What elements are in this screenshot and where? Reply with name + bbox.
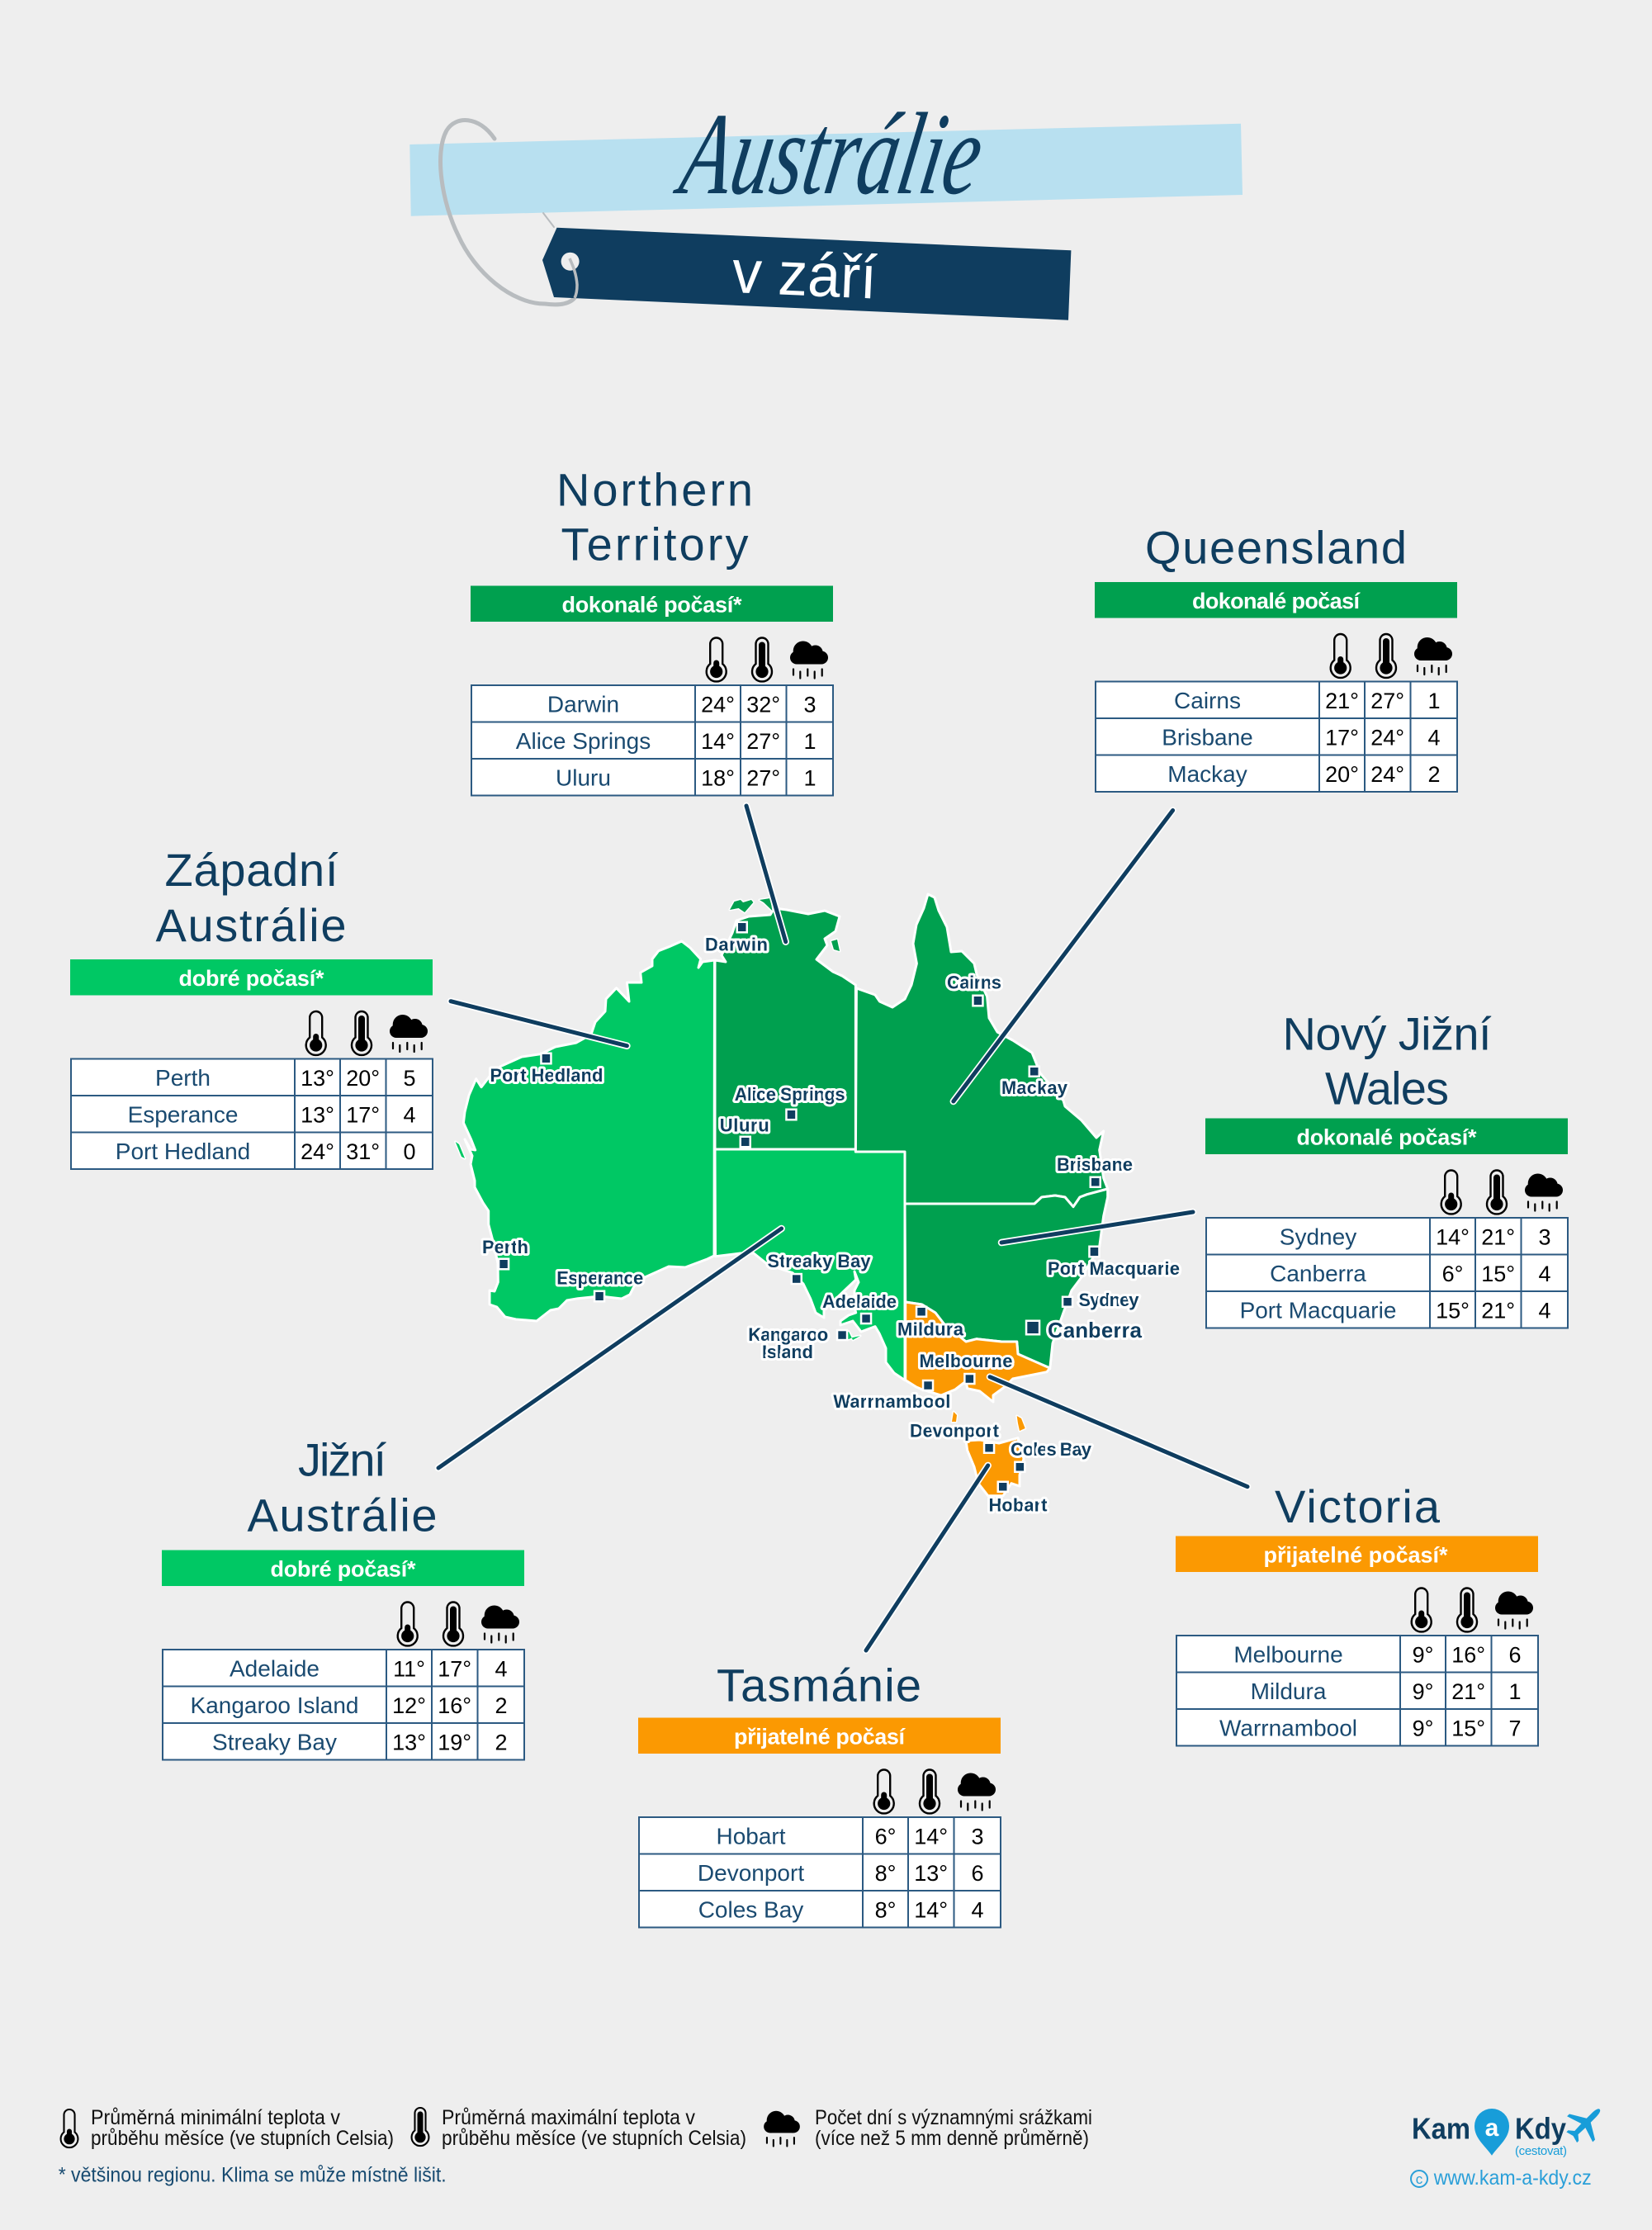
- row: Mildura: 21°: [1451, 1679, 1485, 1704]
- table: [71, 1058, 433, 1169]
- row: Port Hedland: [116, 1139, 416, 1164]
- city labels: Kangaroo: [748, 1324, 828, 1345]
- legend text: rain: (více než 5 mm denně průměrně): [815, 2127, 1089, 2150]
- heading: Západní Austrálie: Austrálie: [155, 899, 347, 951]
- region: Queensland: [855, 894, 1108, 1207]
- leader line: South Australia: [438, 1229, 782, 1468]
- row: Port Hedland: 31°: [346, 1139, 380, 1164]
- heading: Tasmánie: Tasmánie: [717, 1659, 921, 1711]
- panel: Western Australia: [70, 844, 433, 1169]
- row: Cairns: Cairns: [1174, 688, 1241, 713]
- row: Port Macquarie: [1240, 1298, 1551, 1323]
- rating banner: [1095, 582, 1457, 618]
- legend text: minimum temperature: [91, 2106, 394, 2150]
- row: Mackay: 2: [1427, 762, 1441, 787]
- rating banner: přijatelné počasí*: [1263, 1542, 1448, 1567]
- title tag: v září: v září: [731, 237, 878, 312]
- row: Adelaide: 11°: [393, 1656, 425, 1681]
- tag string: [441, 121, 577, 305]
- row: Uluru: 18°: [701, 766, 735, 791]
- heading: Northern Territory: Territory: [561, 518, 748, 570]
- icon: maximum temperature: [1487, 1171, 1507, 1214]
- row: Devonport: 6: [971, 1861, 984, 1886]
- rating banner: dobré počasí*: [178, 966, 324, 991]
- icon: rain: [790, 641, 828, 679]
- icon: minimum temperature: [398, 1602, 418, 1645]
- city labels: Adelaide: [822, 1291, 897, 1312]
- city labels: Perth: [482, 1237, 528, 1257]
- row: Darwin: [547, 692, 817, 717]
- heading: Západní Austrálie: Západní: [165, 844, 338, 896]
- row: Alice Springs: Alice Springs: [516, 728, 651, 754]
- row: Perth: Perth: [155, 1065, 211, 1091]
- city labels: Cairns: [947, 973, 1001, 993]
- city labels: Uluru: [720, 1115, 769, 1136]
- row: Brisbane: 4: [1427, 725, 1441, 750]
- table: [1176, 1636, 1538, 1745]
- icon: maximum temperature: [443, 1602, 463, 1645]
- row: Streaky Bay: 13°: [392, 1730, 426, 1755]
- row: Darwin: 3: [803, 692, 817, 717]
- row: Uluru: [556, 765, 817, 791]
- city labels: Streaky Bay: [768, 1251, 871, 1271]
- leader line: Victoria: [990, 1377, 1247, 1487]
- logo: Kam a Kdy: Kam: [1412, 2112, 1470, 2146]
- row: Brisbane: [1162, 725, 1441, 750]
- heading: Northern Territory: [556, 464, 753, 570]
- leader line: Western Australia: [451, 1001, 627, 1046]
- icon: map pin: a: [1485, 2114, 1499, 2142]
- table: [1206, 1218, 1568, 1328]
- row: Port Hedland: 24°: [301, 1139, 334, 1164]
- leader line: Queensland: [954, 811, 1173, 1101]
- row: Coles Bay: 4: [971, 1897, 984, 1922]
- row: Uluru: 1: [803, 766, 817, 791]
- row: Sydney: Sydney: [1280, 1224, 1356, 1250]
- row: Kangaroo Island: Kangaroo Island: [191, 1693, 358, 1718]
- city labels: Island: [762, 1342, 813, 1362]
- row: Kangaroo Island: [191, 1693, 508, 1718]
- legend: [61, 2106, 1092, 2150]
- icon: maximum temperature: [1457, 1588, 1477, 1631]
- row: Port Hedland: 0: [403, 1139, 416, 1164]
- icon: map pin: [1474, 2109, 1509, 2156]
- logo: Kam a Kdy: (cestovat): [1515, 2144, 1567, 2158]
- row: Alice Springs: 1: [803, 729, 817, 754]
- icon: rain: [481, 1605, 519, 1643]
- panel: New South Wales: [1205, 1007, 1568, 1328]
- title band: Austrálie: [409, 124, 1243, 216]
- row: Streaky Bay: Streaky Bay: [212, 1729, 337, 1755]
- icon: airplane: [1559, 2096, 1612, 2150]
- row: Adelaide: 17°: [438, 1656, 471, 1681]
- row: Coles Bay: 14°: [914, 1897, 948, 1922]
- row: Sydney: [1280, 1224, 1551, 1250]
- row: Perth: 13°: [301, 1066, 334, 1091]
- row: Mildura: [1251, 1678, 1522, 1704]
- row: Hobart: Hobart: [716, 1823, 786, 1849]
- legend text: rain: [815, 2106, 1092, 2150]
- row: Darwin: 24°: [701, 692, 735, 717]
- icon: minimum temperature: [1441, 1171, 1461, 1214]
- row: Cairns: 21°: [1325, 689, 1359, 713]
- legend icon: minimum temperature: [61, 2109, 78, 2147]
- rating banner: [162, 1551, 524, 1586]
- row: Adelaide: [230, 1656, 508, 1681]
- row: Perth: 5: [403, 1066, 416, 1091]
- row: Hobart: 14°: [914, 1825, 948, 1849]
- city labels: Hobart: [989, 1495, 1048, 1516]
- city labels: Brisbane: [1057, 1154, 1133, 1175]
- rating banner: přijatelné počasí: [734, 1724, 906, 1749]
- city labels: Mackay: [1001, 1077, 1068, 1098]
- city labels: Coles Bay: [1011, 1439, 1092, 1460]
- website link: c: [1416, 2171, 1423, 2187]
- legend text: maximum temperature: průběhu měsíce (ve stupních Celsia): [442, 2127, 746, 2150]
- panel: Victoria: [1176, 1480, 1538, 1745]
- leader line: New South Wales: [1001, 1212, 1193, 1243]
- rating banner: dobré počasí*: [271, 1557, 416, 1582]
- city labels: Port Macquarie: [1048, 1258, 1180, 1279]
- row: Port Macquarie: 21°: [1481, 1298, 1515, 1323]
- row: Perth: 20°: [346, 1066, 380, 1091]
- rating banner: [70, 959, 433, 996]
- title script: Austrálie: Austrálie: [668, 88, 992, 219]
- panel: Tasmania: [638, 1659, 1001, 1927]
- table: [1096, 682, 1457, 792]
- rating banner: [1205, 1118, 1568, 1154]
- row: Port Macquarie: 4: [1538, 1298, 1551, 1323]
- row: Warrnambool: 7: [1508, 1716, 1522, 1740]
- city labels: Warrnambool: [833, 1391, 950, 1412]
- region: Tasmania: [952, 1412, 1025, 1496]
- row: Mackay: 24°: [1370, 762, 1404, 787]
- row: Kangaroo Island: 12°: [392, 1693, 426, 1718]
- heading: Nový Jižní Wales: Wales: [1325, 1062, 1449, 1115]
- row: Brisbane: 24°: [1370, 725, 1404, 750]
- row: Devonport: Devonport: [698, 1860, 804, 1886]
- city labels: [482, 935, 1180, 1516]
- map of Australia: [456, 894, 1108, 1496]
- row: Adelaide: Adelaide: [230, 1656, 320, 1681]
- logo: Kam a Kdy: Kdy: [1515, 2112, 1566, 2146]
- row: Warrnambool: [1219, 1716, 1522, 1740]
- row: Coles Bay: 8°: [875, 1897, 896, 1922]
- row: Port Macquarie: Port Macquarie: [1240, 1298, 1396, 1323]
- legend text: maximum temperature: Průměrná maximální teplota v: [442, 2106, 695, 2129]
- city labels: Devonport: [910, 1421, 1000, 1442]
- icon: minimum temperature: [874, 1770, 894, 1813]
- row: Esperance: 17°: [346, 1103, 380, 1128]
- logo: Kam a Kdy: [1412, 2096, 1612, 2158]
- row: Port Macquarie: 15°: [1436, 1298, 1470, 1323]
- legend text: maximum temperature: [442, 2106, 746, 2150]
- legend text: minimum temperature: Průměrná minimální teplota v: [91, 2106, 340, 2129]
- row: Coles Bay: [698, 1897, 984, 1922]
- row: Esperance: Esperance: [128, 1101, 238, 1128]
- row: Cairns: [1174, 688, 1441, 713]
- leader line: Tasmania: [866, 1465, 988, 1650]
- row: Cairns: 27°: [1370, 689, 1404, 713]
- icon: rain: [1525, 1174, 1563, 1210]
- row: Warrnambool: 9°: [1413, 1716, 1433, 1740]
- region: New South Wales: [905, 1189, 1108, 1369]
- row: Port Hedland: Port Hedland: [116, 1139, 250, 1164]
- row: Mackay: 20°: [1325, 762, 1359, 787]
- icon: maximum temperature: [752, 637, 772, 681]
- region: Victoria: [906, 1302, 1050, 1402]
- rating banner: [1176, 1536, 1538, 1572]
- heading: Northern Territory: Northern: [556, 464, 753, 515]
- table: [163, 1650, 524, 1760]
- row: Esperance: [128, 1101, 416, 1128]
- row: Sydney: 21°: [1481, 1225, 1515, 1250]
- icon: rain: [1495, 1592, 1533, 1628]
- row: Streaky Bay: 2: [495, 1730, 508, 1755]
- city labels: Port Hedland: [490, 1065, 603, 1086]
- row: Esperance: 4: [403, 1103, 416, 1128]
- row: Perth: [155, 1065, 416, 1091]
- row: Kangaroo Island: 2: [495, 1693, 508, 1718]
- city markers: [499, 923, 1100, 1491]
- row: Hobart: 3: [971, 1825, 984, 1849]
- heading: Západní Austrálie: [155, 844, 347, 951]
- row: Canberra: 6°: [1442, 1262, 1463, 1286]
- website link: www.kam-a-kdy.cz: [1433, 2166, 1592, 2190]
- city labels: Alice Springs: [735, 1084, 845, 1105]
- footnote: * většinou regionu. Klima se může místně lišit.: [59, 2164, 447, 2187]
- row: Cairns: 1: [1427, 689, 1441, 713]
- row: Sydney: 14°: [1436, 1225, 1470, 1250]
- heading: Jižní Austrálie: Austrálie: [248, 1489, 438, 1541]
- legend text: minimum temperature: průběhu měsíce (ve stupních Celsia): [91, 2127, 394, 2150]
- row: Streaky Bay: [212, 1729, 508, 1755]
- legend icon: rain: [764, 2111, 800, 2147]
- rating banner: dokonalé počasí*: [561, 593, 742, 618]
- icon: minimum temperature: [707, 637, 727, 681]
- leader line: Northern Territory: [746, 806, 786, 942]
- heading: Jižní Austrálie: Jižní: [298, 1433, 386, 1486]
- legend text: rain: Počet dní s významnými srážkami: [815, 2106, 1092, 2129]
- row: Canberra: 4: [1538, 1262, 1551, 1286]
- region: Western Australia: [456, 941, 715, 1321]
- city labels: Mildura: [897, 1319, 964, 1340]
- heading: Nový Jižní Wales: Nový Jižní: [1283, 1007, 1492, 1060]
- row: Devonport: 8°: [875, 1861, 896, 1886]
- rating banner: dokonalé počasí*: [1296, 1124, 1477, 1149]
- icon: rain: [390, 1015, 428, 1052]
- row: Uluru: Uluru: [556, 765, 611, 791]
- icon: minimum temperature: [1331, 634, 1351, 678]
- row: Brisbane: 17°: [1325, 725, 1359, 750]
- row: Mackay: [1167, 761, 1441, 787]
- icon: maximum temperature: [1376, 634, 1396, 678]
- icon: maximum temperature: [920, 1770, 940, 1813]
- city labels: Canberra: [1048, 1318, 1143, 1342]
- row: Devonport: 13°: [914, 1861, 948, 1886]
- icon: minimum temperature: [306, 1011, 326, 1055]
- row: Melbourne: 9°: [1413, 1643, 1433, 1668]
- icon: minimum temperature: [1412, 1588, 1432, 1631]
- panel: Northern Territory: [471, 464, 833, 796]
- row: Melbourne: Melbourne: [1233, 1641, 1343, 1668]
- row: Alice Springs: 14°: [701, 729, 735, 754]
- heading: Victoria: Victoria: [1275, 1480, 1441, 1532]
- rating banner: [638, 1717, 1001, 1754]
- heading: Queensland: Queensland: [1145, 522, 1407, 573]
- city labels: Darwin: [705, 935, 768, 955]
- icon: rain: [958, 1773, 996, 1810]
- row: Hobart: [716, 1823, 984, 1849]
- row: Streaky Bay: 19°: [438, 1730, 471, 1755]
- row: Adelaide: 4: [495, 1656, 508, 1681]
- row: Esperance: 13°: [301, 1103, 334, 1128]
- row: Sydney: 3: [1538, 1225, 1551, 1250]
- panel: South Australia: [162, 1433, 524, 1760]
- row: Melbourne: [1233, 1641, 1522, 1668]
- title tag: v září: [542, 228, 1071, 320]
- row: Melbourne: 6: [1508, 1643, 1522, 1668]
- city labels: Esperance: [556, 1268, 643, 1289]
- row: Kangaroo Island: 16°: [438, 1693, 471, 1718]
- row: Mildura: 9°: [1413, 1679, 1433, 1704]
- icon: maximum temperature: [352, 1011, 372, 1055]
- row: Brisbane: Brisbane: [1162, 725, 1253, 750]
- row: Warrnambool: 15°: [1451, 1716, 1485, 1740]
- heading: Nový Jižní Wales: [1283, 1007, 1492, 1115]
- row: Mackay: Mackay: [1167, 761, 1247, 787]
- row: Canberra: [1270, 1261, 1551, 1286]
- row: Alice Springs: 27°: [746, 729, 780, 754]
- legend icon: maximum temperature: [412, 2108, 428, 2146]
- icon: rain: [1414, 637, 1452, 675]
- region: South Australia: [715, 1149, 905, 1380]
- row: Mildura: 1: [1508, 1679, 1522, 1704]
- row: Mildura: Mildura: [1251, 1678, 1327, 1704]
- row: Darwin: 32°: [746, 692, 780, 717]
- rating banner: dokonalé počasí: [1192, 589, 1361, 613]
- city labels: Sydney: [1078, 1290, 1139, 1310]
- table: [471, 685, 833, 796]
- row: Hobart: 6°: [875, 1825, 896, 1849]
- panel: Queensland: [1095, 522, 1457, 792]
- row: Warrnambool: Warrnambool: [1219, 1716, 1357, 1740]
- row: Darwin: Darwin: [547, 692, 619, 717]
- row: Coles Bay: Coles Bay: [698, 1897, 803, 1922]
- rating banner: [471, 586, 833, 622]
- row: Canberra: Canberra: [1270, 1261, 1366, 1286]
- row: Alice Springs: [516, 728, 817, 754]
- heading: Jižní Austrálie: [248, 1433, 438, 1541]
- row: Canberra: 15°: [1481, 1262, 1515, 1286]
- row: Uluru: 27°: [746, 766, 780, 791]
- table: [639, 1817, 1001, 1927]
- city labels: Melbourne: [920, 1351, 1012, 1371]
- row: Devonport: [698, 1860, 984, 1886]
- region: Northern Territory: [715, 898, 855, 1149]
- row: Melbourne: 16°: [1451, 1643, 1485, 1668]
